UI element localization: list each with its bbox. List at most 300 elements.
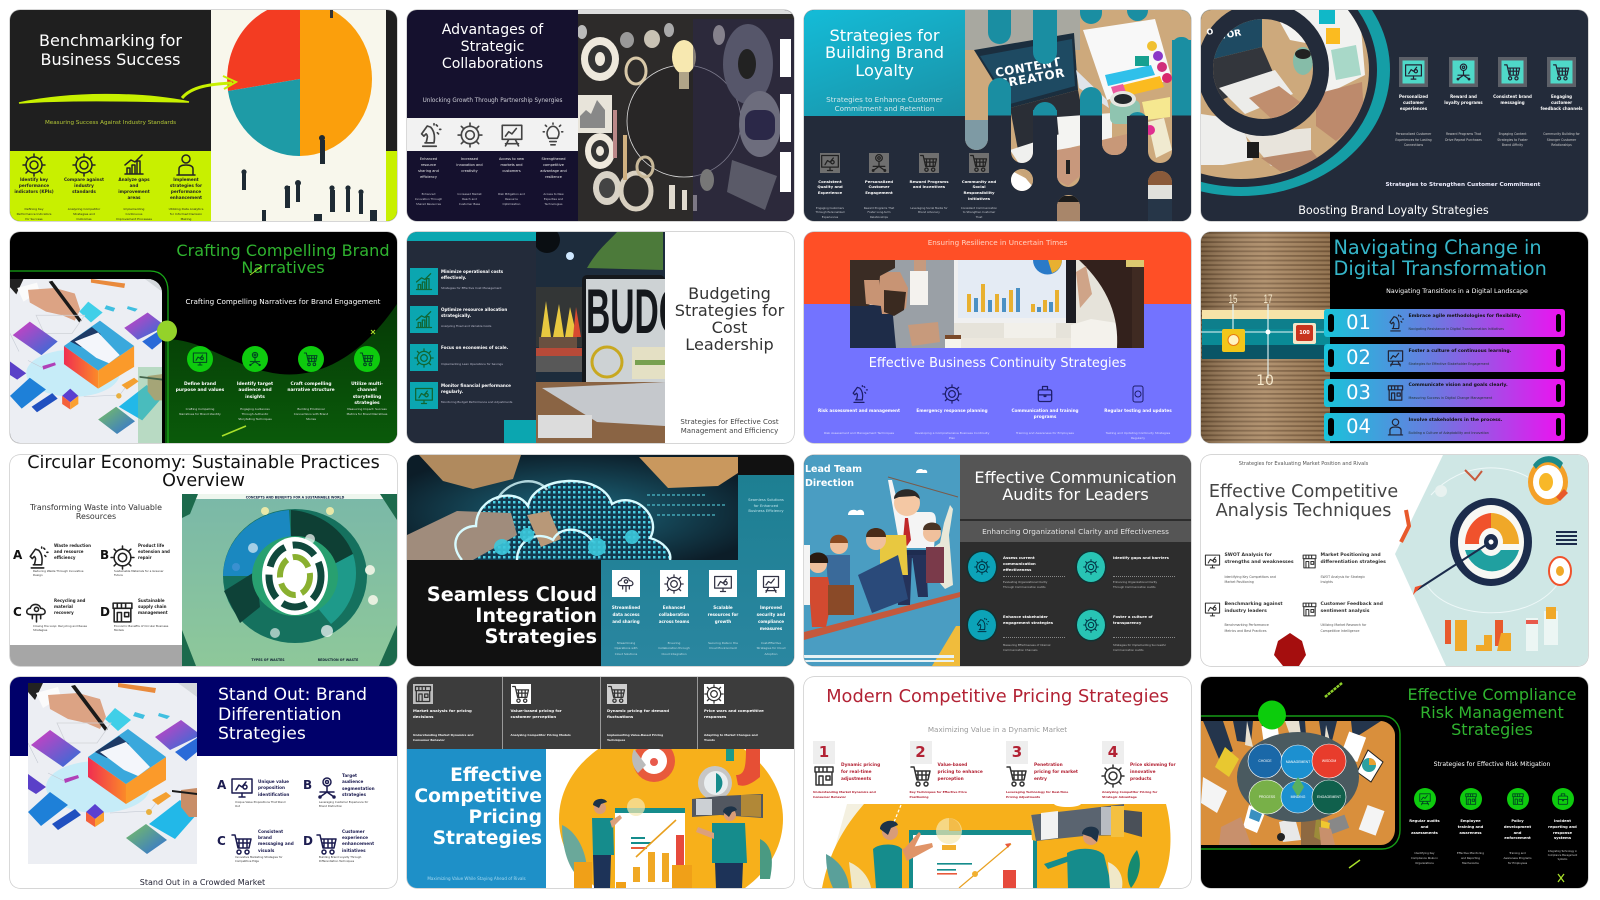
item: positioning: differentiation strategies [1320, 560, 1386, 565]
image: isometric brand box [28, 683, 197, 864]
column: audits: Organizations [1415, 861, 1434, 865]
column: personalized: Engagement [865, 190, 893, 195]
title [1200, 483, 1406, 520]
subtitle: Resources [76, 512, 116, 521]
image: meeting table with framed border: CHOICE [1258, 759, 1272, 763]
column: price wars: Trends [704, 738, 715, 742]
column: feedback channels: Community Building for [1543, 132, 1580, 136]
column label: Strengthened [542, 156, 565, 160]
column: brand messaging: Brand Affinity [1502, 143, 1523, 147]
subtitle: Strategies for Effective Risk Mitigation [1434, 761, 1550, 768]
column: market analysis: Market analysis for pricing [413, 708, 472, 713]
item: resource allocation: Optimize resource allocation [441, 307, 507, 312]
step 1 [813, 741, 905, 799]
column: testing and updates [1088, 385, 1188, 443]
item A: Design [33, 573, 43, 577]
lime brush arrow [18, 75, 238, 104]
column: policy: development [1504, 825, 1531, 829]
column label: efficiency [420, 175, 437, 179]
item: SWOT: strengths and weaknesses [1224, 560, 1294, 565]
subtitle: Strategies for Effective Cost [680, 418, 779, 426]
column: community: Initiatives [968, 196, 990, 201]
column: training: awareness [1459, 830, 1482, 834]
item: gaps: Enhancing Organizational Clarity [1113, 580, 1157, 584]
column: reward programs: Reward Programs [909, 178, 949, 184]
column: price wars: Price wars and competitive [704, 708, 764, 713]
title: Business Success [40, 50, 181, 69]
item: minimize costs: Strategies for Effective Cost Management [441, 286, 502, 290]
item: positioning [1300, 552, 1396, 590]
column: brand messaging: Strategies to Foster [1497, 138, 1528, 142]
column: personalized experiences: Personalized Customer [1396, 132, 1431, 136]
column: reward and loyalty: Reward and [1450, 94, 1477, 98]
item A: Waste reduction [54, 543, 91, 548]
image caption: Direction [805, 478, 854, 489]
blue title panel [407, 749, 546, 888]
image: wooden timeline: 17 [1263, 294, 1272, 307]
tagline: Business Efficiency [748, 509, 784, 513]
column: target audience: Identify target [237, 382, 273, 387]
column: brand messaging: messaging [1500, 100, 1525, 104]
step 3: Pricing Adjustments [1006, 795, 1040, 799]
column: collaboration: Ensuring [668, 641, 680, 645]
column label: competitive [543, 163, 564, 167]
item: minimize costs: Minimize operational costs [441, 269, 503, 274]
item A: Unique Value Propositions That Stand [235, 800, 285, 804]
column: policy: for Employees [1508, 861, 1527, 865]
column: value-based: Value-based pricing for [510, 708, 562, 713]
column description [543, 192, 564, 206]
item D: Differentiation Techniques [319, 859, 354, 863]
column label [456, 156, 483, 173]
column label [499, 156, 524, 173]
item A [217, 775, 305, 813]
item B: Brand Distinction [319, 804, 342, 808]
image: content creator laptop with drips: CREATOR [998, 65, 1066, 90]
callout: Strategies to Strengthen Customer Commitment [1386, 182, 1540, 188]
teal panel [601, 475, 794, 666]
column: audits: Identifying Key [1414, 851, 1435, 855]
column: dynamic pricing [600, 677, 698, 749]
item C: Competitive Edge [235, 859, 259, 863]
item C: material [54, 604, 73, 609]
subtitle band: Enhancing Organizational Clarity and Effectiveness [982, 527, 1169, 536]
bar 04: Involve stakeholders in the process. [1408, 418, 1502, 423]
item: stakeholders: Communication Channels [1003, 648, 1037, 652]
panel: Crafting Compelling Brand Narratives [10, 232, 397, 443]
item: assess [968, 552, 1068, 596]
image: wooden timeline: 10 [1256, 373, 1273, 389]
column description: Innovation Through [415, 197, 442, 201]
column: security [747, 570, 795, 666]
image: ringed laptop photo: ATOR [1213, 28, 1242, 42]
title panel [960, 455, 1191, 519]
column: community: Social [972, 184, 986, 189]
bar 01: 01 [1346, 311, 1371, 334]
item: assess: Assess current [1003, 555, 1035, 560]
column: consistent quality: Experience [818, 190, 842, 195]
column: data access [602, 570, 650, 666]
title: Modern Competitive Pricing Strategies [826, 686, 1169, 707]
column: risk assessment: Risk Assessment and Management Techniques [824, 431, 894, 435]
title: Effective Competitive [1209, 482, 1398, 502]
column: scalable: resources for [708, 612, 738, 617]
column: multi-channel: storytelling [353, 395, 381, 400]
column: data access: Streamlining [617, 641, 635, 645]
column: policy [1494, 788, 1540, 870]
column: industry standards: standards [72, 189, 96, 194]
column: value-based: Analyzing Competitor Pricing Models [510, 733, 571, 737]
image: circular economy diagram [182, 494, 397, 666]
step 2: Value-based [938, 763, 967, 768]
column: narrative structure [287, 346, 335, 421]
column: emergency response [902, 385, 1002, 443]
title [39, 31, 182, 69]
step 2: pricing to enhance [938, 770, 983, 775]
column: personalized experiences: Experiences for Lasting [1395, 138, 1432, 142]
bar 03: Measuring Success in Digital Change Management [1408, 396, 1492, 400]
column: implement: Utilizing Data Analytics [169, 207, 203, 211]
column label: advantage and [540, 169, 567, 173]
item D: supply chain [138, 604, 166, 609]
item A [13, 543, 93, 583]
item B: repair [138, 555, 152, 560]
title: Seamless Cloud [427, 583, 597, 606]
bar 02: Foster a culture of continuous learning. [1408, 349, 1511, 354]
image: meeting table with framed border: WISDOM [1321, 759, 1336, 763]
column: KPIs: Performance Indicators [17, 212, 51, 216]
title: Strategies [1451, 720, 1533, 739]
red heptagon [1272, 633, 1306, 666]
column: target audience: insights [245, 395, 265, 400]
image: ringed laptop photo [1201, 10, 1390, 196]
tagline: Stand Out in a Crowded Market [140, 878, 265, 887]
image: meeting table with framed border: ENGAGEMENT [1316, 795, 1341, 799]
item A: Reducing Waste Through Innovative [33, 569, 84, 573]
column description [415, 192, 442, 206]
bar 04 [1324, 413, 1564, 441]
subtitle: Crafting Compelling Narratives for Brand Engagement [186, 297, 380, 306]
bar 02: Strategies for Effective Stakeholder Engagement [1408, 362, 1489, 366]
column description: Risk Mitigation and [498, 192, 525, 196]
item C: Recycling and [54, 598, 85, 603]
column: feedback channels: Relationships [1551, 143, 1572, 147]
item: minimize costs [410, 268, 503, 295]
title: Audits for Leaders [1002, 485, 1149, 504]
subtitle: Transforming Waste into Valuable [30, 503, 162, 512]
item: assess: communication [1003, 561, 1036, 566]
step 1: Dynamic pricing [841, 763, 880, 768]
title: Crafting Compelling Brand [176, 241, 390, 260]
icon band [407, 118, 578, 150]
column: personalized experiences [1395, 57, 1432, 147]
item B: segmentation [342, 786, 375, 791]
column: policy: and [1514, 830, 1521, 834]
image: circular economy diagram: TYPES OF WASTES [251, 658, 285, 662]
column: community: Consistent Communication [961, 206, 997, 210]
column: multi-channel: Utilize multi- [351, 382, 383, 387]
column: industry standards: Compare against [64, 176, 104, 182]
step 1: 1 [819, 743, 829, 761]
subtitle: Measuring Success Against Industry Standards [45, 120, 176, 126]
lime star [1556, 872, 1566, 884]
column: feedback channels: customer [1551, 100, 1572, 104]
column: testing and updates: Testing and Updating Continuity Strategies [1106, 431, 1170, 435]
column: multi-channel: strategies [354, 401, 380, 406]
image: cartoon team on a rising beam [804, 455, 960, 666]
image: pricing illustration [546, 749, 794, 888]
column: industry standards [64, 153, 104, 220]
title [10, 454, 397, 491]
column: brand messaging: Engaging Content [1499, 132, 1526, 136]
item C: C [13, 605, 22, 619]
column: market analysis: Understanding Market Dynamics and [413, 733, 473, 737]
item: transparency [1077, 610, 1187, 658]
column: KPIs: performance [19, 183, 49, 188]
column: KPIs: indicators (KPIs) [14, 189, 54, 194]
column: security: Improved [760, 605, 782, 610]
column: target audience: audience and [238, 388, 272, 393]
subtitle: Maximizing Value in a Dynamic Market [928, 725, 1067, 734]
item B: B [303, 778, 312, 792]
title [1396, 686, 1588, 738]
lime squiggle lower [222, 425, 246, 437]
item C: Strategies [33, 628, 47, 632]
image: meeting table with framed border: MANAGEMENT [1285, 760, 1310, 764]
image: meeting table with framed border: MINDING [1290, 795, 1305, 799]
column: consistent quality: Engaging Customers [816, 206, 844, 210]
image: content creator laptop with drips: CONTENT [994, 54, 1062, 79]
item: transparency: transparency [1113, 620, 1141, 625]
tagline: Strategies for Evaluating Market Position and Rivals [1239, 461, 1368, 467]
step 4 [1102, 741, 1191, 799]
column: personalized experiences: customer [1403, 100, 1424, 104]
item B: Future [114, 573, 123, 577]
column: personalized: Personalized [865, 178, 893, 184]
column: incident reporting: Integrating Technology in [1548, 850, 1577, 853]
item C: Closing the Loop: Recycling and Reuse [33, 624, 87, 628]
column: personalized experiences: experiences [1400, 106, 1427, 110]
item: resource allocation: strategically. [441, 313, 471, 318]
column: implement: strategies for [170, 183, 202, 188]
image: team reviewing charts [850, 260, 1144, 348]
image: circular economy diagram: CONCEPTS AND BENEFITS FOR A SUSTAINABLE WORLD [246, 495, 345, 499]
image: gears and bulb [578, 10, 794, 221]
column: communication and training [995, 385, 1095, 443]
step 2: Positioning [910, 795, 929, 799]
item D: management [138, 610, 168, 615]
column: scalable: Securing Data in the [708, 641, 738, 645]
subtitle: Strategies to Enhance Customer [826, 95, 943, 104]
item D: Building Brand Loyalty Through [319, 855, 361, 859]
image: pie chart with silhouettes [211, 10, 386, 221]
column: training [1448, 788, 1494, 870]
image: wooden timeline [1200, 232, 1330, 443]
column: audits: Compliance Risks in [1411, 856, 1438, 860]
column: community: Trust [976, 215, 982, 219]
bar 01 [1324, 309, 1564, 337]
item C [217, 829, 305, 867]
item: positioning: Market Positioning and [1320, 553, 1381, 558]
column label [540, 156, 567, 179]
navy header [10, 677, 397, 756]
item: benchmarking: Metrics and Best Practices [1224, 629, 1267, 633]
title: Building Brand [825, 43, 944, 62]
step 4: Analyzing Competitor Pricing for [1102, 790, 1157, 794]
column description: Enhanced [422, 192, 435, 196]
column: training: training and [1458, 825, 1483, 829]
item D: enhancement [342, 841, 374, 846]
panel: Effective Competitive Pricing Strategies [407, 677, 794, 888]
title: Effective Communication [974, 468, 1177, 487]
image: pricing illustration crop [804, 804, 1191, 888]
column: personalized experiences: Connections [1404, 143, 1423, 147]
title: Loyalty [855, 61, 914, 80]
column: security: measures [760, 626, 782, 631]
tagline: Maximizing Value While Staying Ahead of Rivals [427, 876, 526, 881]
item D: experience [342, 835, 368, 840]
bar 01: Navigating Resistance in Digital Transformation Initiatives [1408, 327, 1504, 331]
column: audits: and [1421, 825, 1428, 829]
column: multi-channel: Metrics for Brand Narratives [347, 412, 387, 416]
column: personalized: Reward Programs That [864, 206, 894, 210]
item D: initiatives [342, 848, 366, 853]
lime squiggle [1346, 858, 1362, 870]
image: content creator laptop with drips [965, 10, 1191, 221]
lime footer band [10, 150, 397, 220]
title [960, 470, 1191, 504]
item: economies of scale: Focus on economies of scale. [441, 345, 508, 350]
item: monitor performance: Monitor financial performance [441, 383, 511, 388]
column: brand purpose: Crafting Compelling [186, 407, 214, 411]
column: incident reporting: Compliance Management [1548, 854, 1577, 857]
panel: Seamless Cloud Integration Strategies [407, 455, 794, 666]
column: reward programs [909, 153, 949, 214]
column: incident reporting [1540, 788, 1586, 870]
item B [303, 775, 395, 813]
subtitle [826, 95, 943, 113]
item B: B [100, 548, 109, 562]
title [665, 285, 794, 354]
item: SWOT: Identifying Key Competitors and [1224, 575, 1276, 579]
panel: Benchmarking for Business Success [10, 10, 397, 220]
column: personalized experiences: Personalized [1399, 94, 1428, 98]
image: meeting table with framed border [1200, 677, 1400, 852]
panel: Boosting Brand Loyalty Strategies [1200, 10, 1588, 220]
item: transparency: Communication Audits [1113, 648, 1144, 652]
column: narrative structure: Craft compelling [290, 382, 332, 387]
panel: Strategies for Building Brand Loyalty [804, 10, 1191, 220]
step 2: Key Techniques for Effective Price [910, 790, 967, 794]
item: minimize costs: effectively. [441, 275, 466, 280]
step 4: Price skimming for [1130, 763, 1176, 768]
item: SWOT: Market Positioning [1224, 580, 1254, 584]
column: incident reporting: reporting and [1548, 825, 1577, 829]
item: customer feedback [1300, 601, 1396, 639]
subtitle band [960, 521, 1191, 542]
column: target audience: Through Authentic [242, 412, 268, 416]
image: wooden timeline: 100 [1299, 330, 1310, 336]
column: collaboration: Collaboration through [658, 646, 690, 650]
title: Overview [162, 471, 245, 491]
column: reward programs: and Incentives [913, 184, 945, 189]
step 2 [910, 741, 1002, 799]
step 3: entry [1034, 777, 1047, 782]
column: price wars [698, 677, 794, 749]
column: personalized: Relationships [870, 215, 888, 219]
column: community: to Strengthen Customer [963, 210, 995, 214]
column: consistent quality: Through Personalized [816, 210, 844, 214]
step 3: Leveraging Technology for Real-Time [1006, 790, 1068, 794]
step 4: products [1130, 777, 1151, 782]
item B: audience [342, 779, 363, 784]
title [176, 241, 390, 277]
column: gaps: and [130, 183, 138, 188]
column: audits: assessments [1411, 830, 1438, 834]
title [218, 686, 367, 745]
column: personalized [864, 153, 894, 219]
panel: Circular Economy [10, 455, 397, 666]
item: SWOT [1204, 552, 1294, 590]
item: benchmarking: Benchmarking Performance [1224, 623, 1269, 627]
column: communication and training: Training and Awareness for Employees [1016, 431, 1074, 435]
column: policy: Training and [1509, 851, 1526, 855]
column: security: Cost-Effective [761, 641, 781, 645]
column: feedback channels: Engaging [1551, 94, 1572, 98]
title: Analysis Techniques [1216, 501, 1391, 521]
column: training: Effective Monitoring [1457, 851, 1484, 855]
title: Strategies [218, 724, 306, 744]
column: feedback channels [1540, 57, 1583, 147]
column: implement [168, 154, 204, 220]
item B: strategies [342, 792, 366, 797]
column: gaps: areas [127, 195, 141, 200]
item: benchmarking: Benchmarking against [1224, 602, 1283, 607]
column: multi-channel [346, 346, 388, 416]
column label: innovation and [456, 163, 483, 167]
column: consistent quality: Consistent [818, 178, 842, 184]
column: policy: Awareness Programs [1503, 856, 1532, 860]
column: narrative structure: narrative structure [287, 388, 335, 393]
step 2: 2 [915, 743, 926, 761]
bar 01: Embrace agile methodologies for flexibility. [1408, 314, 1521, 319]
column: risk assessment [809, 385, 909, 443]
column: multi-channel: Measuring Impact: Success [347, 407, 387, 411]
column: collaboration [650, 570, 698, 666]
column: gaps: improvement [118, 189, 150, 194]
column: testing and updates: Regularly [1131, 436, 1145, 440]
image: glowing cloud [407, 455, 738, 560]
column label: sharing and [418, 169, 439, 173]
column label: resilience [545, 175, 562, 179]
column: audits: Regular audits [1409, 819, 1440, 823]
step 1: adjustments [841, 777, 871, 782]
column: industry standards: Analyzing Competitor [68, 207, 100, 211]
item: stakeholders: Enhance stakeholder [1003, 614, 1048, 619]
title: Cost [712, 318, 747, 337]
column: narrative structure: Building Emotional [297, 407, 325, 411]
image: target and charts [1390, 455, 1588, 666]
column label: Access to new [499, 156, 524, 160]
tagline: for Enhanced [754, 504, 778, 508]
column: training: Employee [1460, 819, 1481, 823]
column: multi-channel: channel [357, 388, 377, 393]
image: meeting table with framed border: PROCESS [1258, 795, 1276, 799]
title: Strategies for [829, 26, 940, 44]
title [442, 22, 544, 72]
item: monitor performance [410, 382, 534, 410]
column: reward and loyalty [1444, 57, 1483, 142]
